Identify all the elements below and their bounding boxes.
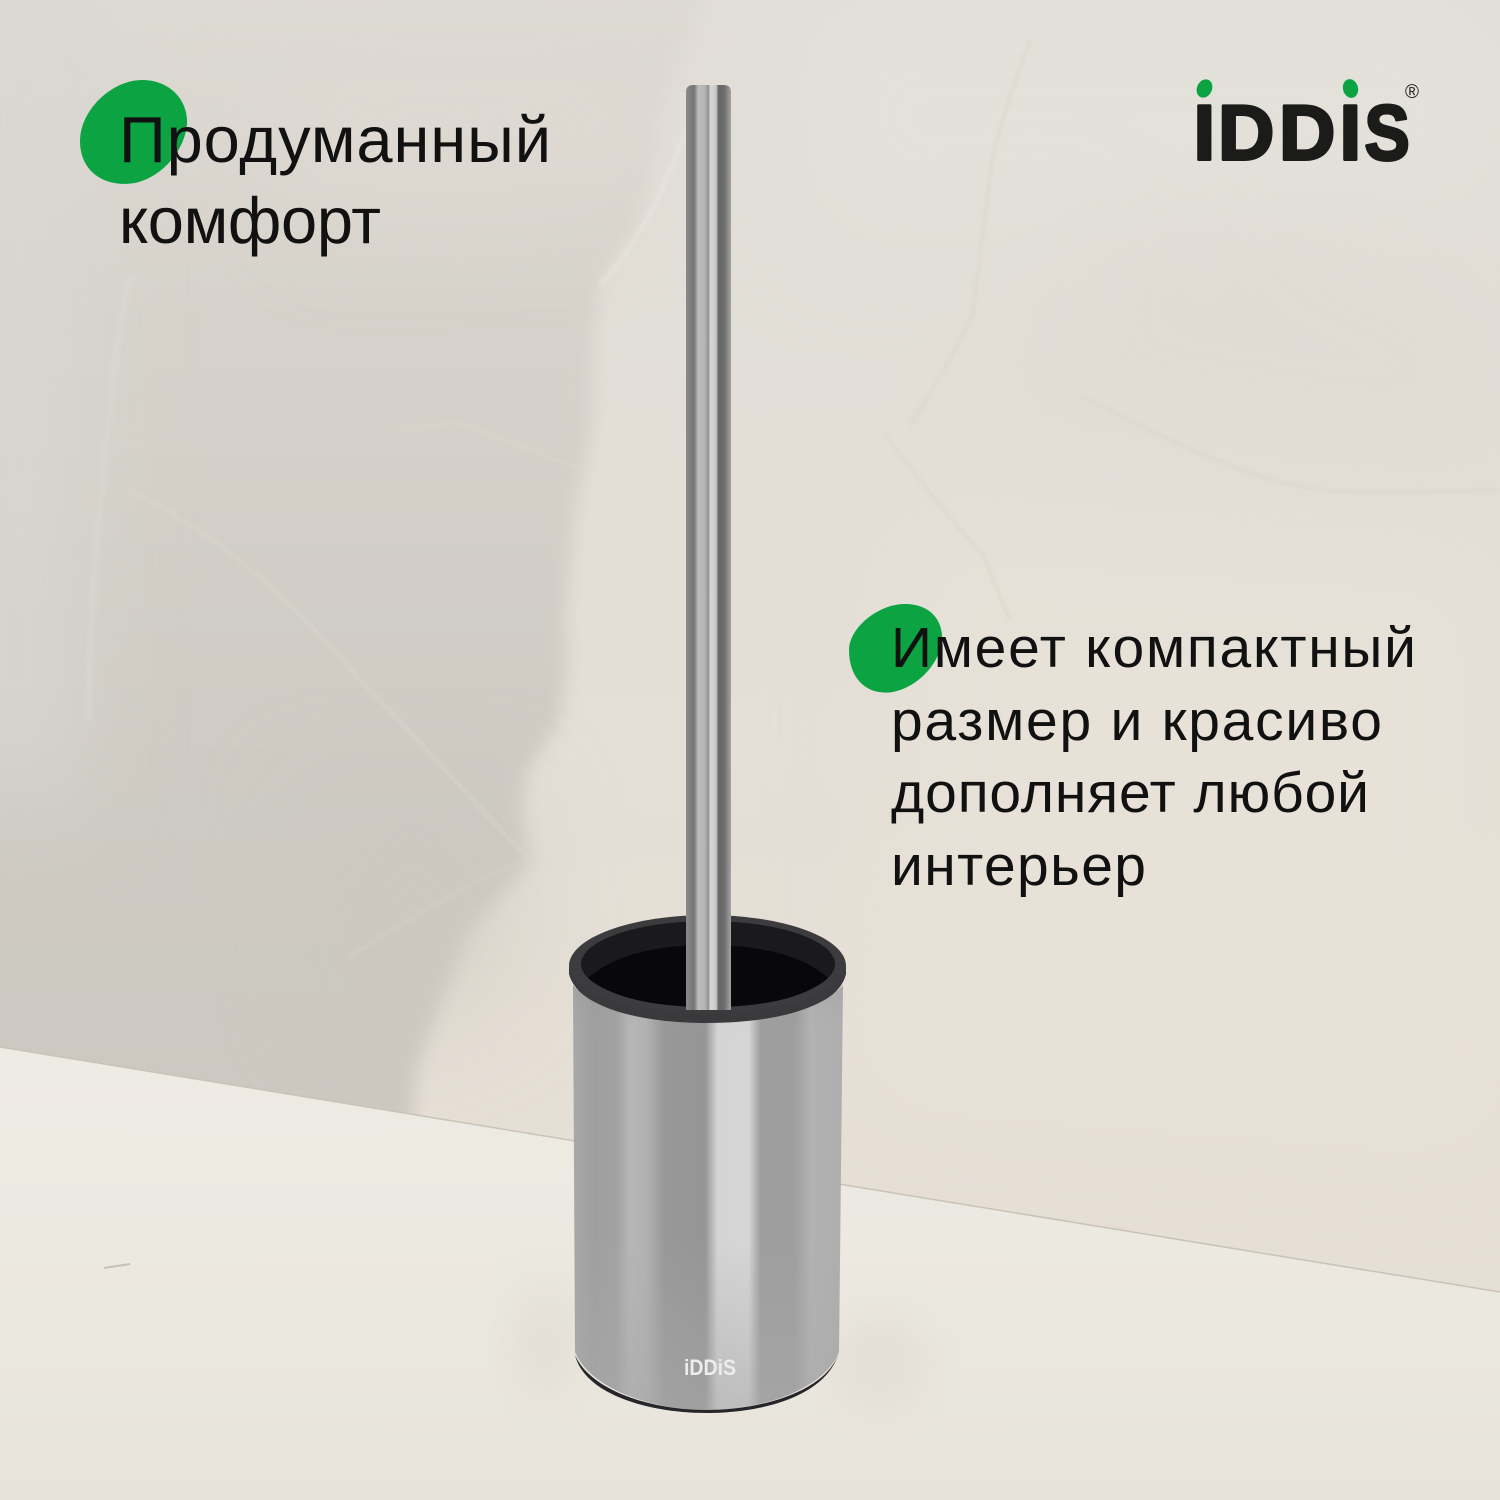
logo: IDDIS bbox=[1194, 77, 1419, 177]
logo: IDDIS: D bbox=[1279, 88, 1335, 176]
heading text: Продуманный bbox=[119, 103, 551, 176]
darker left part of the marble slab bbox=[0, 136, 628, 1114]
base shadow line bbox=[575, 1355, 838, 1413]
steel cup body bbox=[573, 985, 843, 1410]
description text: дополняет любой bbox=[891, 761, 1369, 825]
description text: размер и красиво bbox=[891, 689, 1382, 753]
background: marble wall bbox=[0, 10, 1482, 1114]
cup front lip bbox=[569, 966, 846, 1026]
logo: IDDIS: I bbox=[1194, 88, 1215, 176]
green blob bbox=[849, 604, 942, 693]
description text: Имеет компактный bbox=[891, 616, 1416, 680]
engraved logo on cup: iDDiS bbox=[684, 1355, 736, 1380]
background: marble floor bbox=[0, 1047, 1500, 1500]
description text: интерьер bbox=[891, 834, 1146, 898]
product: toilet brush holder bbox=[569, 85, 846, 1413]
steel cup vertical shading bbox=[573, 985, 843, 1410]
brush handle bbox=[686, 85, 731, 1010]
heading text: комфорт bbox=[119, 184, 381, 257]
logo: IDDIS: I bbox=[1340, 88, 1361, 176]
cup rim and interior bbox=[569, 915, 846, 1017]
logo: IDDIS: D bbox=[1218, 88, 1274, 176]
logo: IDDIS: ® bbox=[1405, 82, 1419, 103]
heading with green blob bbox=[80, 80, 551, 257]
description with green blob bbox=[849, 604, 1416, 898]
green blob bbox=[80, 80, 187, 184]
logo: IDDIS: S bbox=[1364, 90, 1410, 177]
